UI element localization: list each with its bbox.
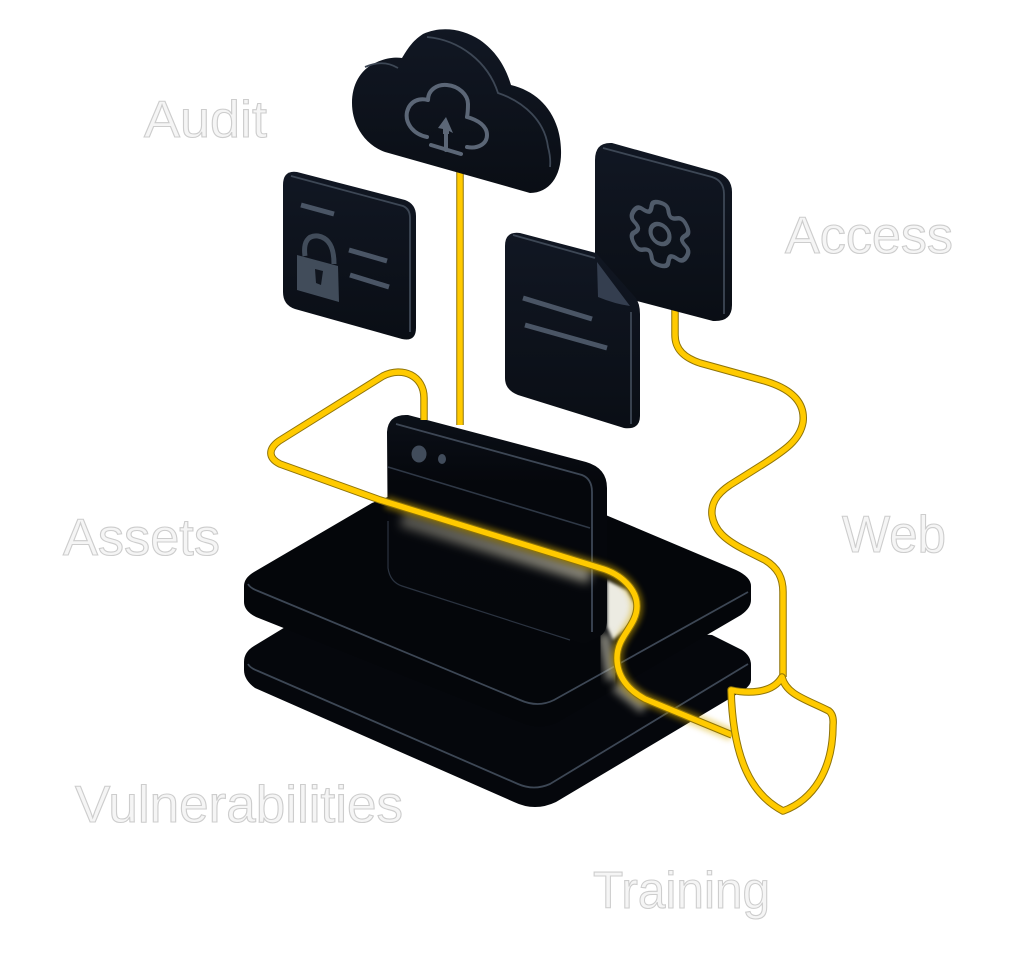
padlock card [283,172,416,340]
wire: gear card to shield [675,310,803,677]
document card [505,233,640,428]
gear card [595,143,732,321]
label: Web: Web [842,506,946,564]
cloud icon [407,85,487,154]
label: Access: Access [785,207,953,265]
upper platform [244,462,751,726]
window button small [438,454,446,464]
label: Vulnerabilities: Vulnerabilities [75,776,403,834]
shield outline [731,677,833,811]
yellow glow on the wire [386,502,732,735]
label: Assets: Assets [63,509,220,567]
document text lines [523,298,607,348]
card header bar [301,205,334,214]
lower platform [244,612,751,807]
card text lines [349,250,389,287]
label: Audit: Audit [144,91,268,149]
window divider [388,467,590,528]
folded corner [597,262,630,306]
glow band under the wire [402,519,590,576]
cloud upload panel [352,29,561,193]
browser window panel [387,415,607,643]
window button large [412,446,426,462]
padlock icon [297,236,339,302]
label: Training: Training [593,862,770,920]
gear icon [632,195,688,273]
wire: vertical link from cloud to window [456,160,464,425]
light patch beside the wire bend [604,580,645,708]
wire: loop across window to shield [271,372,732,735]
